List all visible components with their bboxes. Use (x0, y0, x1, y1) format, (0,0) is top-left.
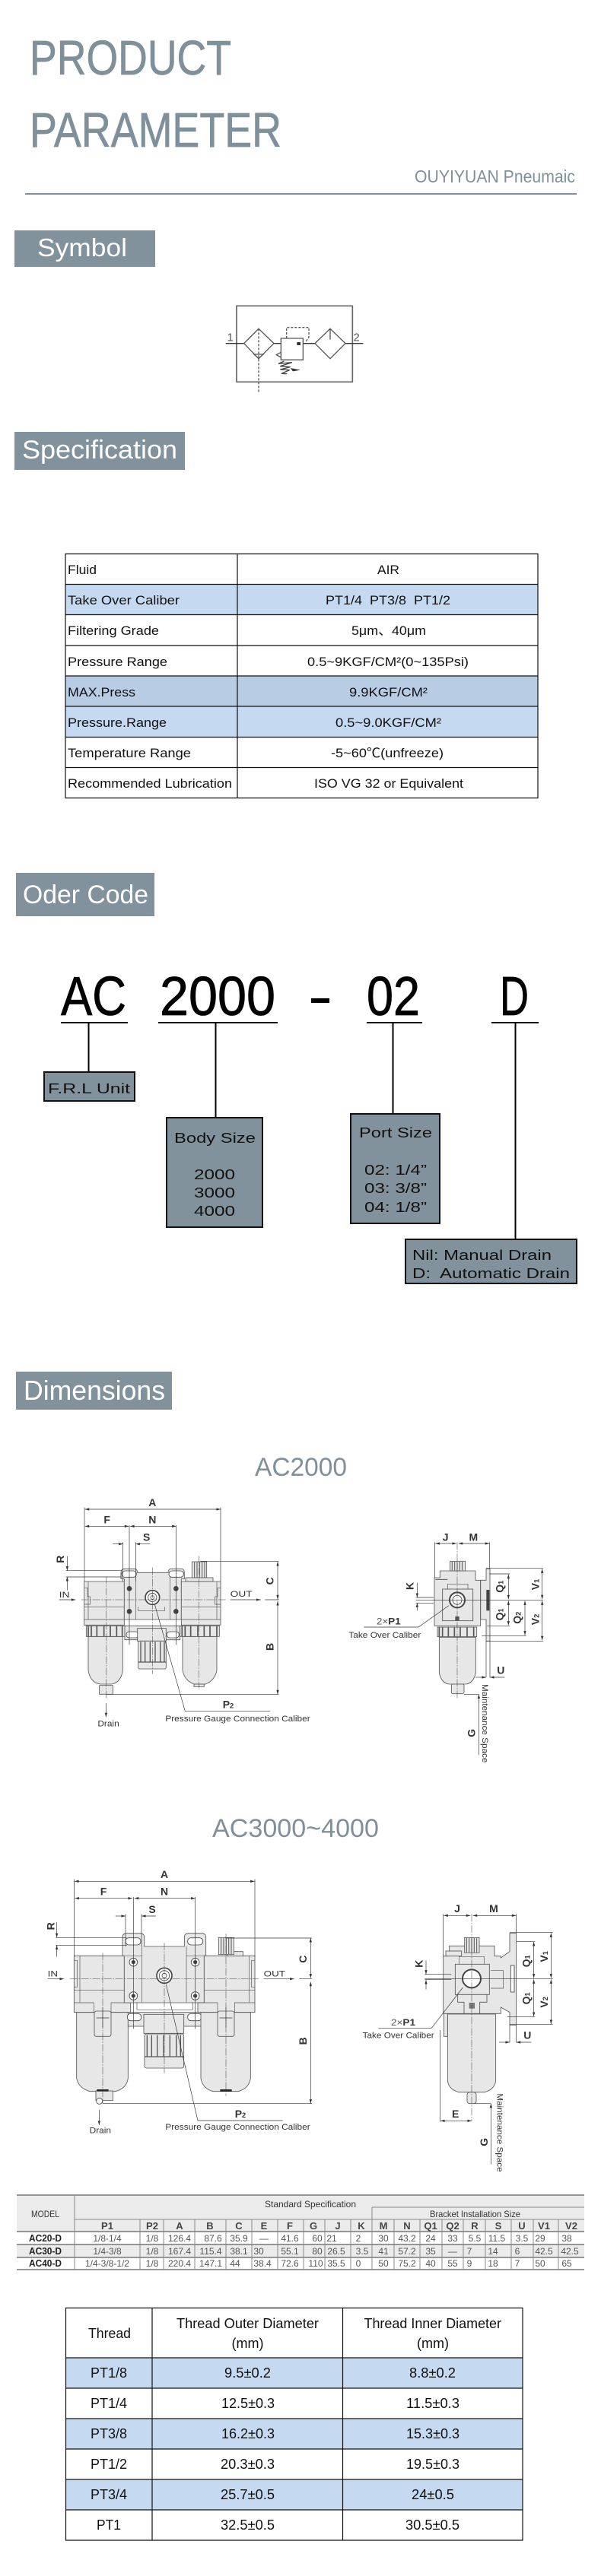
row: AC40-D: 0 (356, 2258, 361, 2269)
dimension labels: IN (48, 1969, 58, 1978)
specification table: ISO VG 32 or Equivalent (314, 776, 463, 791)
symbol diagram (226, 306, 363, 393)
box: Body Size (167, 1118, 262, 1227)
row: AC40-D: 38.4 (253, 2258, 272, 2269)
dimension labels: P2 (223, 1699, 234, 1711)
dimension labels: OUT (264, 1969, 285, 1978)
box: Port Size: 02: 1/4” (364, 1163, 427, 1178)
row: AC40-D: 40 (425, 2258, 436, 2269)
row: AC30-D: 30 (253, 2246, 264, 2257)
row: AC30-D: 35 (425, 2246, 436, 2257)
row: AC30-D: 55.1 (281, 2246, 299, 2257)
side labels: V2 (538, 1997, 550, 2008)
table headers: C (235, 2220, 243, 2232)
row: AC30-D: 26.5 (327, 2246, 345, 2257)
table headers: MODEL (31, 2209, 59, 2219)
thread size table: 24±0.5 (412, 2487, 454, 2502)
specification table: 5μm、40μm (351, 623, 426, 638)
row: AC30-D: 1/8 (146, 2246, 159, 2257)
row: AC30-D: 1/4-3/8 (93, 2246, 122, 2257)
table headers: Standard Specification (265, 2199, 356, 2210)
dimension labels: A (161, 1868, 168, 1880)
box: F.R.L Unit: F.R.L Unit (48, 1081, 130, 1096)
table headers: S (495, 2220, 502, 2232)
box: Port Size: 04: 1/8” (364, 1200, 427, 1215)
side labels: K (403, 1582, 415, 1590)
dimension labels: N (161, 1886, 168, 1898)
thread size table: 11.5±0.3 (406, 2396, 459, 2411)
row: AC40-D: 7 (515, 2258, 520, 2269)
table headers: G (310, 2220, 317, 2232)
center lines (81, 1556, 226, 1698)
AC2000 front view drawing (54, 1496, 310, 1729)
side body (434, 1561, 490, 1694)
thread size table: PT1/2 (91, 2457, 127, 2472)
dimension labels: S (143, 1531, 150, 1543)
thread size table: PT3/4 (91, 2487, 127, 2502)
box: Body Size: Body Size (174, 1131, 256, 1146)
row: AC40-D: AC40-D (29, 2258, 62, 2269)
side labels: M (489, 1902, 498, 1915)
row: AC30-D: 7 (467, 2246, 472, 2257)
specification table: -5~60℃(unfreeze) (331, 746, 444, 760)
side labels: Q1 (494, 1608, 506, 1620)
specification table (65, 554, 538, 798)
order code diagram (44, 966, 577, 1283)
row: AC40-D: 220.4 (168, 2258, 191, 2269)
row: AC20-D: AC20-D (29, 2233, 62, 2244)
box: Body Size: 3000 (194, 1185, 235, 1201)
row: AC30-D: 41 (378, 2246, 389, 2257)
side labels: Q1 (494, 1581, 506, 1593)
table headers (31, 2199, 577, 2232)
row: AC30-D: 42.5 (561, 2246, 579, 2257)
row: AC20-D: 30 (378, 2233, 389, 2244)
thread size table (65, 2308, 523, 2540)
AC3000~4000 side view drawing (363, 1902, 553, 2172)
row: AC30-D: 115.4 (199, 2246, 222, 2257)
thread size table: 32.5±0.5 (221, 2517, 275, 2533)
thread size table: Thread (88, 2326, 131, 2341)
table headers: P1 (101, 2220, 113, 2232)
side labels: E (452, 2108, 459, 2120)
row: AC30-D: 3.5 (356, 2246, 369, 2257)
row: AC40-D: 1/8 (146, 2258, 159, 2269)
row: AC20-D: 21 (326, 2233, 337, 2244)
row: AC30-D: 42.5 (535, 2246, 553, 2257)
row: AC40-D: 72.6 (281, 2258, 299, 2269)
subheading: AC3000~4000: AC3000~4000 (212, 1814, 379, 1843)
dimension labels: S (148, 1903, 156, 1915)
table headers: F (287, 2220, 293, 2232)
row: AC30-D: — (448, 2246, 457, 2257)
thread size table: 30.5±0.5 (405, 2517, 459, 2533)
thread size table: PT1 (97, 2517, 121, 2533)
row: AC40-D: 110 (308, 2258, 323, 2269)
row: AC20-D: 41.6 (281, 2233, 299, 2244)
order code letters: 2000 (160, 966, 275, 1027)
table headers: R (471, 2220, 479, 2232)
thread size table: 12.5±0.3 (221, 2396, 275, 2411)
order code letters: D (500, 966, 529, 1027)
right lubricator unit (180, 1562, 221, 1686)
side labels: G (466, 1729, 478, 1737)
box: F.R.L Unit (44, 1072, 135, 1101)
thread size table: PT1/4 (91, 2396, 127, 2411)
table headers: Q2 (446, 2220, 459, 2232)
right lubricator unit (198, 1937, 255, 2092)
box: Drain type (405, 1239, 577, 1283)
side labels: Q1 (520, 1955, 533, 1967)
side labels: Q2 (510, 1612, 523, 1624)
box: Port Size: 03: 3/8” (364, 1181, 427, 1196)
side labels: 2×P1 (377, 1616, 401, 1627)
row: AC20-D: 29 (535, 2233, 545, 2244)
row: AC30-D: 57.2 (398, 2246, 416, 2257)
thread size table: Thread Inner Diameter (364, 2316, 501, 2331)
side body (444, 1933, 517, 2104)
table headers: K (358, 2220, 365, 2232)
box: Body Size: 2000 (194, 1167, 235, 1182)
table headers: J (335, 2220, 341, 2232)
side labels (348, 1531, 541, 1762)
dimension labels: Drain (97, 1720, 119, 1729)
dimension labels: C (297, 1956, 309, 1963)
table headers: V2 (565, 2220, 577, 2232)
table headers: V1 (538, 2220, 550, 2232)
row: AC40-D: 147.1 (199, 2258, 222, 2269)
dimension lines (48, 1880, 312, 2125)
table headers: Q1 (424, 2220, 437, 2232)
side labels: G (478, 2138, 490, 2146)
dimension labels: R (44, 1922, 56, 1930)
specification table: Recommended Lubrication (68, 776, 232, 791)
dimension labels: P2 (235, 2108, 246, 2120)
side labels: Take Over Caliber (348, 1631, 421, 1640)
left filter unit (84, 1581, 126, 1694)
center regulator unit (121, 1569, 184, 1669)
row: AC20-D: 1/8 (146, 2233, 159, 2244)
side labels: Maintenance Space (480, 1684, 489, 1762)
dimension labels: R (54, 1556, 66, 1563)
row: AC20-D: 87.6 (204, 2233, 222, 2244)
box: Drain type: Nil: Manual Drain (412, 1248, 552, 1263)
side labels: V2 (529, 1614, 541, 1625)
side labels: V1 (529, 1579, 541, 1590)
center regulator unit (122, 1934, 206, 2068)
left filter unit (74, 1956, 131, 2104)
table headers: M (380, 2220, 387, 2232)
dimension labels: OUT (231, 1590, 253, 1599)
thread size table: PT3/8 (91, 2426, 127, 2441)
row: AC20-D: 60 (312, 2233, 323, 2244)
dimension labels: IN (59, 1591, 70, 1600)
thread size table: 9.5±0.2 (224, 2365, 271, 2381)
dimension lines (59, 1508, 279, 1717)
side labels: 2×P1 (391, 2017, 415, 2028)
specification table: MAX.Press (68, 685, 135, 700)
box: Body Size: 4000 (194, 1204, 235, 1219)
side labels (363, 1902, 550, 2172)
table headers: B (206, 2220, 214, 2232)
heading: Dimensions: Dimensions (24, 1375, 165, 1406)
row: AC40-D (29, 2258, 572, 2269)
side labels: Maintenance Space (494, 2093, 504, 2172)
thread size table: 15.3±0.3 (406, 2426, 459, 2441)
side labels: U (523, 2029, 531, 2041)
side labels: U (497, 1664, 504, 1677)
thread size table: (mm) (417, 2336, 449, 2351)
side labels: K (413, 1960, 425, 1968)
dimension labels: B (297, 2037, 309, 2045)
box: Drain type: D: Automatic Drain (412, 1266, 570, 1281)
row: AC20-D: — (259, 2233, 269, 2244)
specification table: Temperature Range (68, 746, 191, 760)
side labels: V1 (538, 1951, 550, 1962)
side labels: Q1 (520, 1992, 533, 2004)
heading: Symbol (14, 230, 155, 267)
dimensions data table (17, 2195, 584, 2270)
row: AC40-D: 75.2 (398, 2258, 416, 2269)
specification table: 0.5~9KGF/CM²(0~135Psi) (307, 655, 469, 669)
thread size table: 8.8±0.2 (409, 2365, 456, 2381)
row: AC20-D: 11.5 (488, 2233, 506, 2244)
symbol diagram: 1 (227, 332, 234, 344)
heading: Symbol: Symbol (37, 233, 127, 262)
row: AC20-D: 1/8-1/4 (93, 2233, 122, 2244)
row: AC20-D: 33 (447, 2233, 458, 2244)
side labels: M (469, 1531, 478, 1543)
table headers: U (518, 2220, 526, 2232)
specification table: 0.5~9.0KGF/CM² (335, 715, 441, 730)
dimension labels (44, 1868, 310, 2136)
dimension labels: C (264, 1577, 276, 1585)
row: AC40-D: 18 (488, 2258, 498, 2269)
row: AC30-D (29, 2246, 579, 2257)
specification table: Pressure Range (68, 655, 167, 669)
title: OUYIYUAN Pneumaic (415, 167, 575, 186)
row: AC30-D: 167.4 (168, 2246, 191, 2257)
row: AC20-D: 38 (561, 2233, 572, 2244)
thread size table: PT1/8 (91, 2365, 127, 2381)
thread size table: Thread Outer Diameter (176, 2316, 319, 2331)
dimension labels (54, 1496, 310, 1729)
heading: Oder Code (16, 873, 154, 916)
specification table: AIR (377, 563, 399, 577)
row: AC40-D: 55 (447, 2258, 458, 2269)
center lines (70, 1934, 259, 2104)
thread size table: 25.7±0.5 (221, 2487, 275, 2502)
row: AC20-D: 126.4 (168, 2233, 191, 2244)
subheading: AC2000: AC2000 (255, 1453, 347, 1482)
row: AC40-D: 1/4-3/8-1/2 (85, 2258, 129, 2269)
thread size table: 19.5±0.3 (406, 2457, 459, 2472)
dimension labels: Pressure Gauge Connection Caliber (165, 2123, 310, 2132)
specification table: Pressure.Range (68, 715, 167, 730)
row: AC20-D (29, 2233, 572, 2244)
order code letters: 02 (367, 966, 420, 1027)
table headers: A (176, 2220, 183, 2232)
row: AC40-D: 9 (467, 2258, 472, 2269)
row: AC20-D: 5.5 (469, 2233, 482, 2244)
row: AC20-D: 35.9 (230, 2233, 248, 2244)
row: AC40-D: 65 (561, 2258, 572, 2269)
row: AC40-D: 50 (535, 2258, 545, 2269)
title: PARAMETER (30, 103, 281, 157)
dimension labels: Drain (90, 2127, 111, 2136)
row: AC20-D: 24 (425, 2233, 436, 2244)
side labels: Take Over Caliber (363, 2032, 434, 2041)
table headers: E (261, 2220, 268, 2232)
row: AC40-D: 35.5 (327, 2258, 345, 2269)
dimension labels: A (148, 1496, 156, 1508)
box: Port Size: Port Size (359, 1125, 432, 1140)
title: PRODUCT (30, 30, 231, 85)
row: AC20-D: 3.5 (516, 2233, 529, 2244)
symbol diagram: 2 (354, 332, 360, 344)
dimension labels: N (148, 1514, 156, 1526)
side labels: J (443, 1531, 449, 1543)
row: AC20-D: 2 (356, 2233, 361, 2244)
specification table: Take Over Caliber (68, 593, 180, 608)
thread size table: (mm) (231, 2336, 263, 2351)
AC2000 side view drawing (348, 1531, 543, 1762)
AC3000~4000 front view drawing (44, 1868, 312, 2136)
dimension labels: F (100, 1886, 107, 1898)
row: AC20-D: 43.2 (398, 2233, 416, 2244)
side labels: J (454, 1902, 460, 1915)
order code letters (61, 966, 529, 1027)
box: Port Size (351, 1114, 440, 1223)
order code letters: AC (61, 966, 126, 1027)
specification table: PT1/4 PT3/8 PT1/2 (326, 593, 450, 608)
table headers: P2 (146, 2220, 158, 2232)
dimension labels: F (103, 1514, 110, 1526)
side dimension lines (364, 1542, 543, 1755)
row: AC30-D: 6 (515, 2246, 520, 2257)
specification table: Fluid (68, 563, 97, 577)
row: AC30-D: 14 (488, 2246, 498, 2257)
heading: Specification (14, 432, 185, 470)
row: AC40-D: 50 (378, 2258, 389, 2269)
row: AC30-D: 38.1 (230, 2246, 248, 2257)
row: AC40-D: 44 (230, 2258, 240, 2269)
dimension labels: B (264, 1643, 276, 1651)
dimension labels: Pressure Gauge Connection Caliber (165, 1715, 310, 1724)
specification table: Filtering Grade (68, 623, 159, 638)
title (25, 30, 577, 195)
row: AC30-D: 80 (312, 2246, 323, 2257)
heading: Oder Code: Oder Code (23, 880, 148, 909)
table headers: Bracket Installation Size (430, 2209, 520, 2219)
table headers: N (403, 2220, 411, 2232)
row: AC30-D: AC30-D (29, 2246, 62, 2257)
thread size table: 20.3±0.3 (221, 2457, 275, 2472)
specification table: 9.9KGF/CM² (349, 685, 428, 700)
heading: Specification: Specification (22, 436, 177, 465)
side dimension lines (378, 1914, 553, 2165)
thread size table: 16.2±0.3 (221, 2426, 275, 2441)
